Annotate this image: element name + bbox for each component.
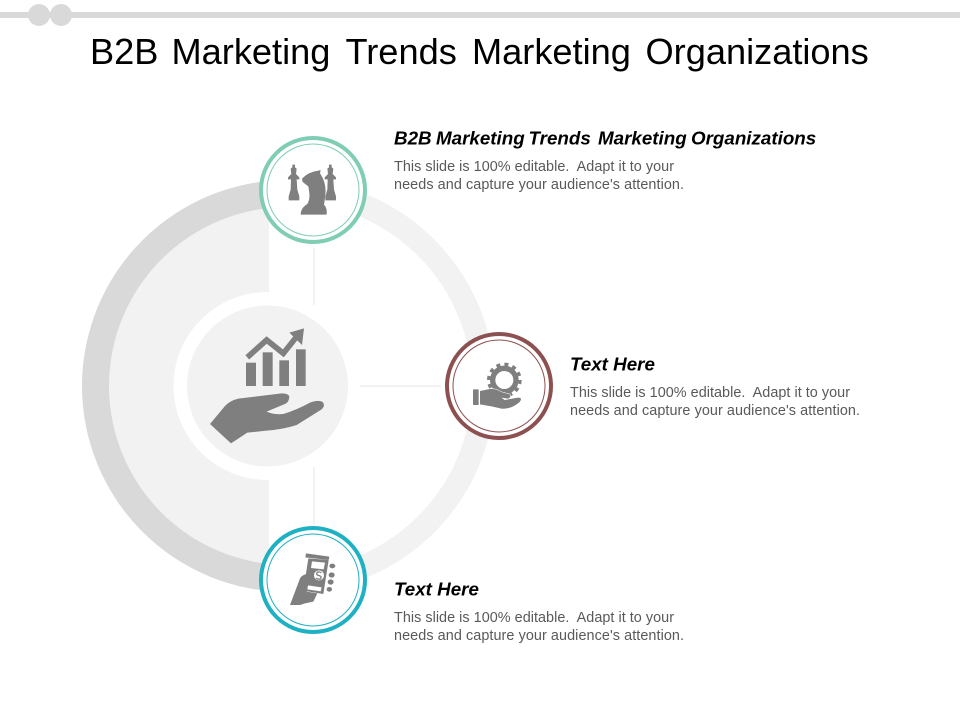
icon: chess pieces: [288, 165, 336, 215]
heading: top: Organizations: [691, 128, 816, 148]
title: Marketing: [172, 31, 330, 72]
text block: top: [394, 128, 816, 193]
title: B2B: [90, 31, 158, 72]
node: bottom teal circle: [261, 528, 365, 632]
title: Organizations: [646, 31, 869, 72]
icon: hand holding gear: [473, 364, 521, 409]
icon: hand holding money: [290, 553, 335, 605]
title: Marketing: [472, 31, 631, 72]
ring diagram background: [82, 180, 494, 592]
heading: top: Trends: [528, 128, 591, 148]
body: top: This slide is 100% editable. Adapt it to your: [394, 159, 674, 175]
body: bottom: This slide is 100% editable. Adapt it to your: [394, 610, 674, 626]
title: Trends: [346, 31, 457, 72]
body: middle: needs and capture your audience's attention.: [570, 403, 860, 419]
body: middle: This slide is 100% editable. Adapt it to your: [570, 385, 850, 401]
text block: middle: [570, 354, 860, 419]
heading: middle: Text Here: [570, 354, 655, 374]
top decorative bar: [0, 4, 960, 26]
heading: top: Marketing: [598, 128, 687, 148]
center circle with hand and growth chart: [187, 306, 348, 466]
icon: hand holding growth chart: [210, 328, 324, 443]
heading: top: Marketing: [436, 128, 525, 148]
node: middle brown circle: [447, 334, 551, 438]
node: top green circle: [261, 138, 365, 242]
body: bottom: needs and capture your audience's attention.: [394, 628, 684, 644]
heading: bottom: Text Here: [394, 578, 479, 600]
body: top: needs and capture your audience's attention.: [394, 177, 684, 193]
text block: bottom: [394, 578, 684, 644]
heading: top: B2B: [394, 128, 432, 148]
